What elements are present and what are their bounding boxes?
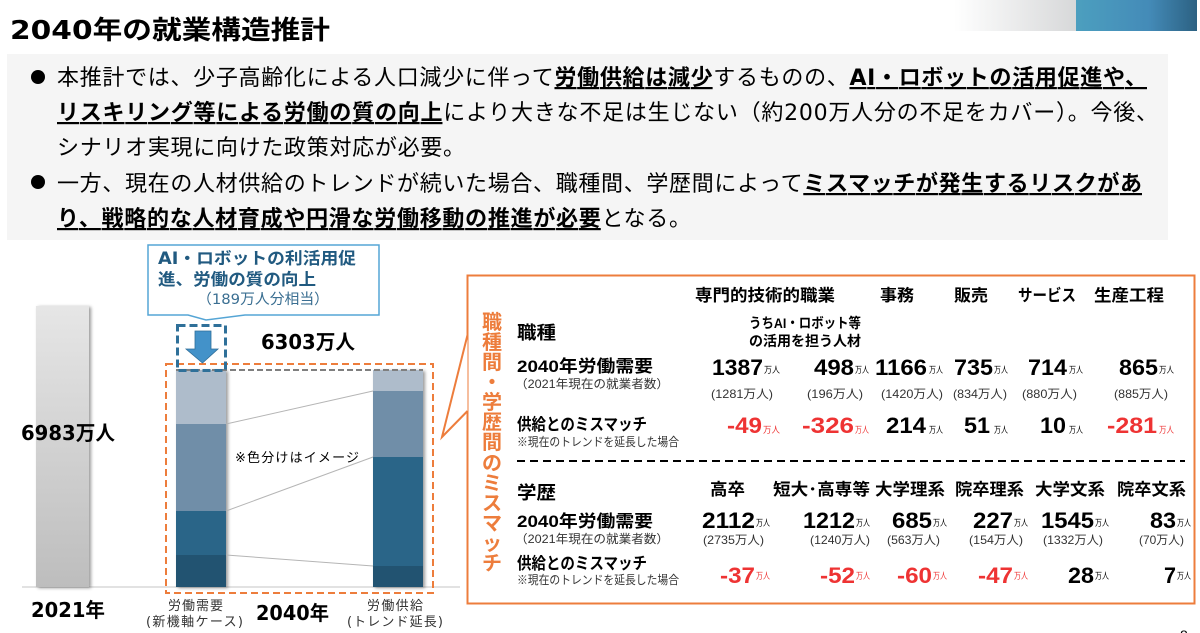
axis labels: demand: (新機軸ケース) (146, 615, 243, 630)
education demand values: 万人 (756, 518, 770, 528)
education 2021 values: (563万人) (887, 533, 940, 547)
vertical heading: ミ (482, 473, 502, 495)
education 2021 values: (70万人) (1139, 533, 1184, 547)
education demand values: 1212 (803, 508, 855, 533)
education demand values: 万人 (933, 518, 947, 528)
education 2021 values: (1240万人) (810, 533, 870, 547)
occupation demand values: 万人 (855, 365, 869, 375)
panel: summary (7, 54, 1168, 240)
occupation header row: サービス (1018, 285, 1076, 305)
education mismatch values: 万人 (1095, 571, 1109, 581)
education demand values: 685 (892, 508, 932, 533)
education mismatch values: 28 (1068, 563, 1094, 588)
occupation 2021 values: (880万人) (1022, 387, 1077, 401)
occupation demand values: 714 (1028, 355, 1068, 380)
row labels: occupation demand: （2021年現在の就業者数） (515, 376, 669, 391)
row labels: occupation demand (515, 356, 669, 391)
education 2021 values: (2735万人) (703, 533, 764, 547)
callout pointer (442, 335, 468, 437)
occupation demand values: 1166 (875, 355, 927, 380)
education demand values: 万人 (1014, 518, 1028, 528)
occupation mismatch values: 万人 (1069, 425, 1083, 435)
bar: 2021 total (36, 306, 89, 587)
sub-header: AI talent: うちAI・ロボット等 (749, 315, 861, 331)
occupation mismatch values: 万人 (855, 425, 869, 435)
education mismatch values: 7 (1164, 563, 1176, 588)
row labels: occupation demand: 2040年労働需要 (517, 356, 653, 376)
stacked bar: supply (373, 370, 423, 587)
callout line 1: AI・ロボットの利活用促 (158, 249, 357, 268)
callout line 3: （189万人分相当） (197, 291, 329, 308)
row labels: education mismatch (517, 554, 679, 587)
occupation 2021 values: (1420万人) (881, 387, 943, 401)
row labels: occupation mismatch: ※現在のトレンドを延長した場合 (517, 435, 679, 449)
vertical heading: ス (482, 493, 502, 515)
label: 2040年: 2040年 (256, 601, 329, 625)
education demand values: 1545 (1041, 508, 1094, 533)
occupation 2021 values: (885万人) (1114, 387, 1168, 401)
education header row: 院卒文系 (1117, 480, 1187, 499)
occupation mismatch values: 10 (1040, 413, 1066, 438)
occupation header row (695, 285, 1164, 305)
row labels: occupation mismatch: 供給とのミスマッチ (517, 415, 647, 434)
occupation demand values (712, 355, 1174, 380)
vertical heading: 間 (482, 352, 502, 374)
education 2021 values (703, 533, 1184, 547)
summary line 2: リスキリング等による労働の質の向上により大きな不足は生じない（約200万人分の不足をカバー）。今後、 (57, 100, 1158, 126)
education 2021 values: (154万人) (969, 533, 1023, 547)
occupation demand values: 865 (1119, 355, 1158, 380)
occupation demand values: 万人 (994, 365, 1008, 375)
row labels: education demand: （2021年現在の就業者数） (515, 531, 669, 546)
stacked bar: demand (176, 370, 226, 587)
occupation demand values: 万人 (764, 365, 780, 375)
row labels: education demand (515, 511, 669, 546)
occupation mismatch values: 万人 (994, 425, 1008, 435)
occupation demand values: 万人 (1069, 365, 1083, 375)
summary line 3: シナリオ実現に向けた政策対応が必要。 (57, 136, 465, 161)
vertical heading: 歴 (482, 412, 502, 434)
axis labels: supply: 労働供給 (367, 599, 423, 614)
education mismatch values: 万人 (756, 571, 770, 581)
sub-header: AI talent (749, 315, 861, 349)
heading: 学歴: 学歴 (517, 482, 556, 503)
education demand values: 万人 (1095, 518, 1109, 528)
grey dashed top line (176, 369, 423, 371)
decorative header band (954, 0, 1197, 31)
education header row (710, 479, 1187, 499)
occupation mismatch values (727, 413, 1174, 438)
label: 6303万人: 6303万人 (261, 330, 355, 354)
education header row: 短大･高専等 (773, 479, 870, 499)
title: 2040年の就業構造推計 (10, 16, 330, 46)
occupation mismatch values: 万人 (929, 425, 943, 435)
occupation demand values: 万人 (1159, 365, 1174, 375)
axis labels: demand (146, 599, 243, 630)
row labels: education mismatch: 供給とのミスマッチ (517, 554, 647, 573)
occupation 2021 values: (834万人) (953, 387, 1007, 401)
education mismatch values: -52 (820, 563, 855, 588)
axis labels: supply: (トレンド延長) (347, 615, 443, 630)
education mismatch values (720, 563, 1191, 588)
occupation mismatch values: 万人 (1159, 425, 1174, 435)
blue dashed box (178, 326, 226, 370)
occupation demand values: 735 (954, 355, 993, 380)
occupation demand values: 498 (814, 355, 854, 380)
occupation header row: 販売 (954, 286, 988, 305)
education mismatch values: -37 (720, 563, 755, 588)
heading: 職種: 職種 (517, 323, 556, 343)
sub-header: AI talent: の活用を担う人材 (749, 333, 861, 349)
education header row: 大学理系 (875, 479, 946, 499)
row labels: occupation mismatch (517, 415, 679, 449)
vertical heading: 種 (482, 331, 502, 354)
education demand values: 万人 (1177, 518, 1191, 528)
education mismatch values: -60 (897, 563, 932, 588)
education header row: 大学文系 (1035, 479, 1106, 499)
education demand values: 2112 (702, 508, 755, 533)
occupation header row: 専門的技術的職業 (695, 286, 836, 305)
bullet 1 (31, 70, 45, 84)
occupation mismatch values: -326 (802, 413, 854, 438)
summary line 5: り、戦略的な人材育成や円滑な労働移動の推進が必要となる。 (57, 206, 691, 232)
education demand values: 万人 (856, 518, 870, 528)
education header row: 院卒理系 (955, 480, 1025, 499)
vertical heading: 職 (482, 311, 502, 334)
education demand values: 83 (1150, 508, 1176, 533)
callout line 2: 進、労働の質の向上 (158, 270, 316, 289)
summary line 1: 本推計では、少子高齢化による人口減少に伴って労働供給は減少するものの、AI・ロボットの活用促進や、 (57, 66, 1147, 91)
row labels: education mismatch: ※現在のトレンドを延長した場合 (517, 573, 679, 587)
vertical heading: 学 (482, 391, 502, 414)
occupation mismatch values: 214 (886, 413, 927, 438)
vertical heading: マ (482, 513, 502, 535)
axis labels: supply (347, 599, 443, 630)
row labels: education demand: 2040年労働需要 (517, 511, 653, 531)
occupation 2021 values: (1281万人) (711, 387, 773, 401)
vertical heading: ・ (482, 372, 502, 394)
label: 2021年: 2021年 (31, 598, 105, 622)
vertical heading: チ (482, 553, 502, 575)
vertical heading: 間 (482, 432, 502, 454)
occupation mismatch values: 万人 (763, 425, 780, 435)
summary line 4: 一方、現在の人材供給のトレンドが続いた場合、職種間、学歴間によってミスマッチが発生するリスクがあ (57, 171, 1142, 197)
occupation mismatch values: -281 (1107, 413, 1157, 438)
education mismatch values: -47 (978, 563, 1013, 588)
occupation header row: 生産工程 (1094, 286, 1164, 305)
connector lines (226, 391, 373, 566)
panel: mismatch table (442, 276, 1194, 604)
icon: down arrow (186, 331, 218, 363)
education demand values: 227 (973, 508, 1013, 533)
education header row: 高卒 (710, 479, 745, 499)
occupation 2021 values (711, 387, 1168, 401)
occupation demand values: 万人 (929, 365, 943, 375)
vertical heading: の (482, 453, 502, 475)
occupation demand values: 1387 (712, 355, 763, 380)
axis labels: demand: 労働需要 (168, 599, 223, 614)
occupation mismatch values: 51 (964, 413, 990, 438)
education mismatch values: 万人 (1177, 571, 1191, 581)
education mismatch values: 万人 (933, 571, 947, 581)
education mismatch values: 万人 (1014, 571, 1028, 581)
education mismatch values: 万人 (856, 571, 870, 581)
baseline axis (22, 586, 460, 588)
education demand values (702, 508, 1191, 533)
occupation 2021 values: (196万人) (807, 387, 863, 401)
education 2021 values: (1332万人) (1043, 533, 1103, 547)
bullet 2 (31, 175, 45, 189)
vertical heading: ッ (482, 533, 502, 555)
occupation mismatch values: -49 (727, 413, 762, 438)
callout: AI and robots (148, 245, 379, 320)
label: 6983万人: 6983万人 (21, 421, 115, 445)
note: colour coding: ※色分けはイメージ (235, 451, 359, 466)
orange dashed frame (166, 364, 433, 593)
occupation header row: 事務 (880, 286, 915, 305)
